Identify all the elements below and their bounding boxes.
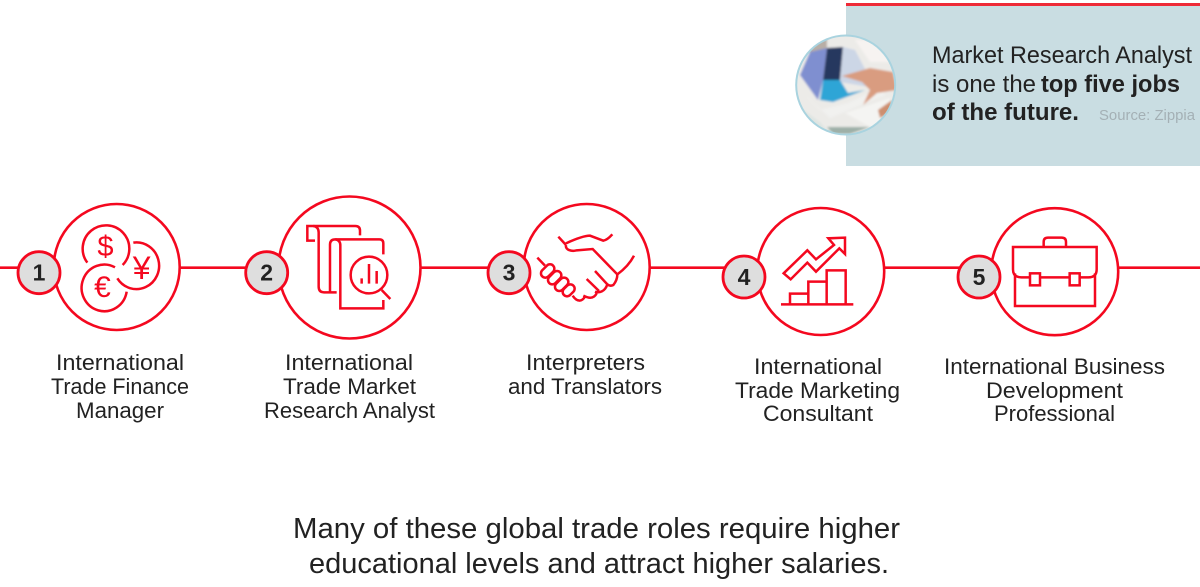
label 4: Trade Marketing (735, 378, 900, 403)
label 1: International (56, 350, 184, 375)
label 4: International (754, 354, 882, 379)
callout text: Market Research Analyst (932, 42, 1192, 69)
label 3 (508, 350, 662, 399)
bottom statement: Many of these global trade roles require higher (293, 513, 900, 545)
label 5 (944, 354, 1165, 426)
icon: currency coins: ¥ (132, 250, 151, 286)
bottom statement: educational levels and attract higher salaries. (309, 548, 889, 580)
number badge 2: 2 (260, 260, 273, 286)
label 5: Development (986, 378, 1124, 403)
icon: handshake (537, 234, 634, 301)
label 2: International (285, 350, 413, 375)
number badge 4: 4 (738, 264, 751, 290)
number badge 5: 5 (973, 264, 986, 290)
number badge 1: 1 (33, 260, 46, 286)
number badge 1 (18, 252, 60, 294)
label 1: Manager (76, 398, 164, 423)
number badge 3: 3 (503, 260, 515, 286)
label 2 (264, 350, 436, 423)
label 3: Interpreters (526, 350, 645, 375)
label 2: Research Analyst (264, 398, 436, 423)
step 1: finance manager (18, 204, 189, 423)
panel: market research callout (795, 3, 1200, 166)
icon: documents with magnifier (307, 226, 390, 308)
label 5: Professional (994, 401, 1115, 426)
timeline line (0, 266, 1200, 269)
callout text (932, 42, 1196, 126)
icon: briefcase (1013, 238, 1097, 306)
step 5: business development (944, 208, 1165, 426)
step 3: interpreters and translators (488, 204, 662, 399)
step 2: market research analyst (246, 196, 436, 423)
step 4: marketing consultant (723, 208, 900, 426)
callout text: is one the (932, 71, 1036, 98)
number badge 2 (246, 252, 288, 294)
callout text: of the future. (932, 99, 1079, 126)
label 2: Trade Market (283, 374, 417, 399)
label 1: Trade Finance (51, 374, 189, 399)
number badge 3 (488, 252, 530, 294)
icon: growth chart (781, 238, 853, 304)
icon: currency coins: € (94, 271, 111, 304)
label 4 (735, 354, 900, 426)
callout text: Source: Zippia (1099, 107, 1196, 124)
callout text: top five jobs (1041, 71, 1180, 98)
bottom statement (293, 513, 900, 580)
label 1 (51, 350, 189, 423)
photo: hand on laptop (795, 34, 897, 136)
label 3: and Translators (508, 374, 662, 399)
icon: currency coins (82, 225, 159, 311)
number badge 5 (958, 256, 1000, 298)
label 4: Consultant (763, 401, 874, 426)
icon: currency coins: $ (97, 231, 114, 263)
number badge 4 (723, 256, 765, 298)
label 5: International Business (944, 354, 1165, 379)
